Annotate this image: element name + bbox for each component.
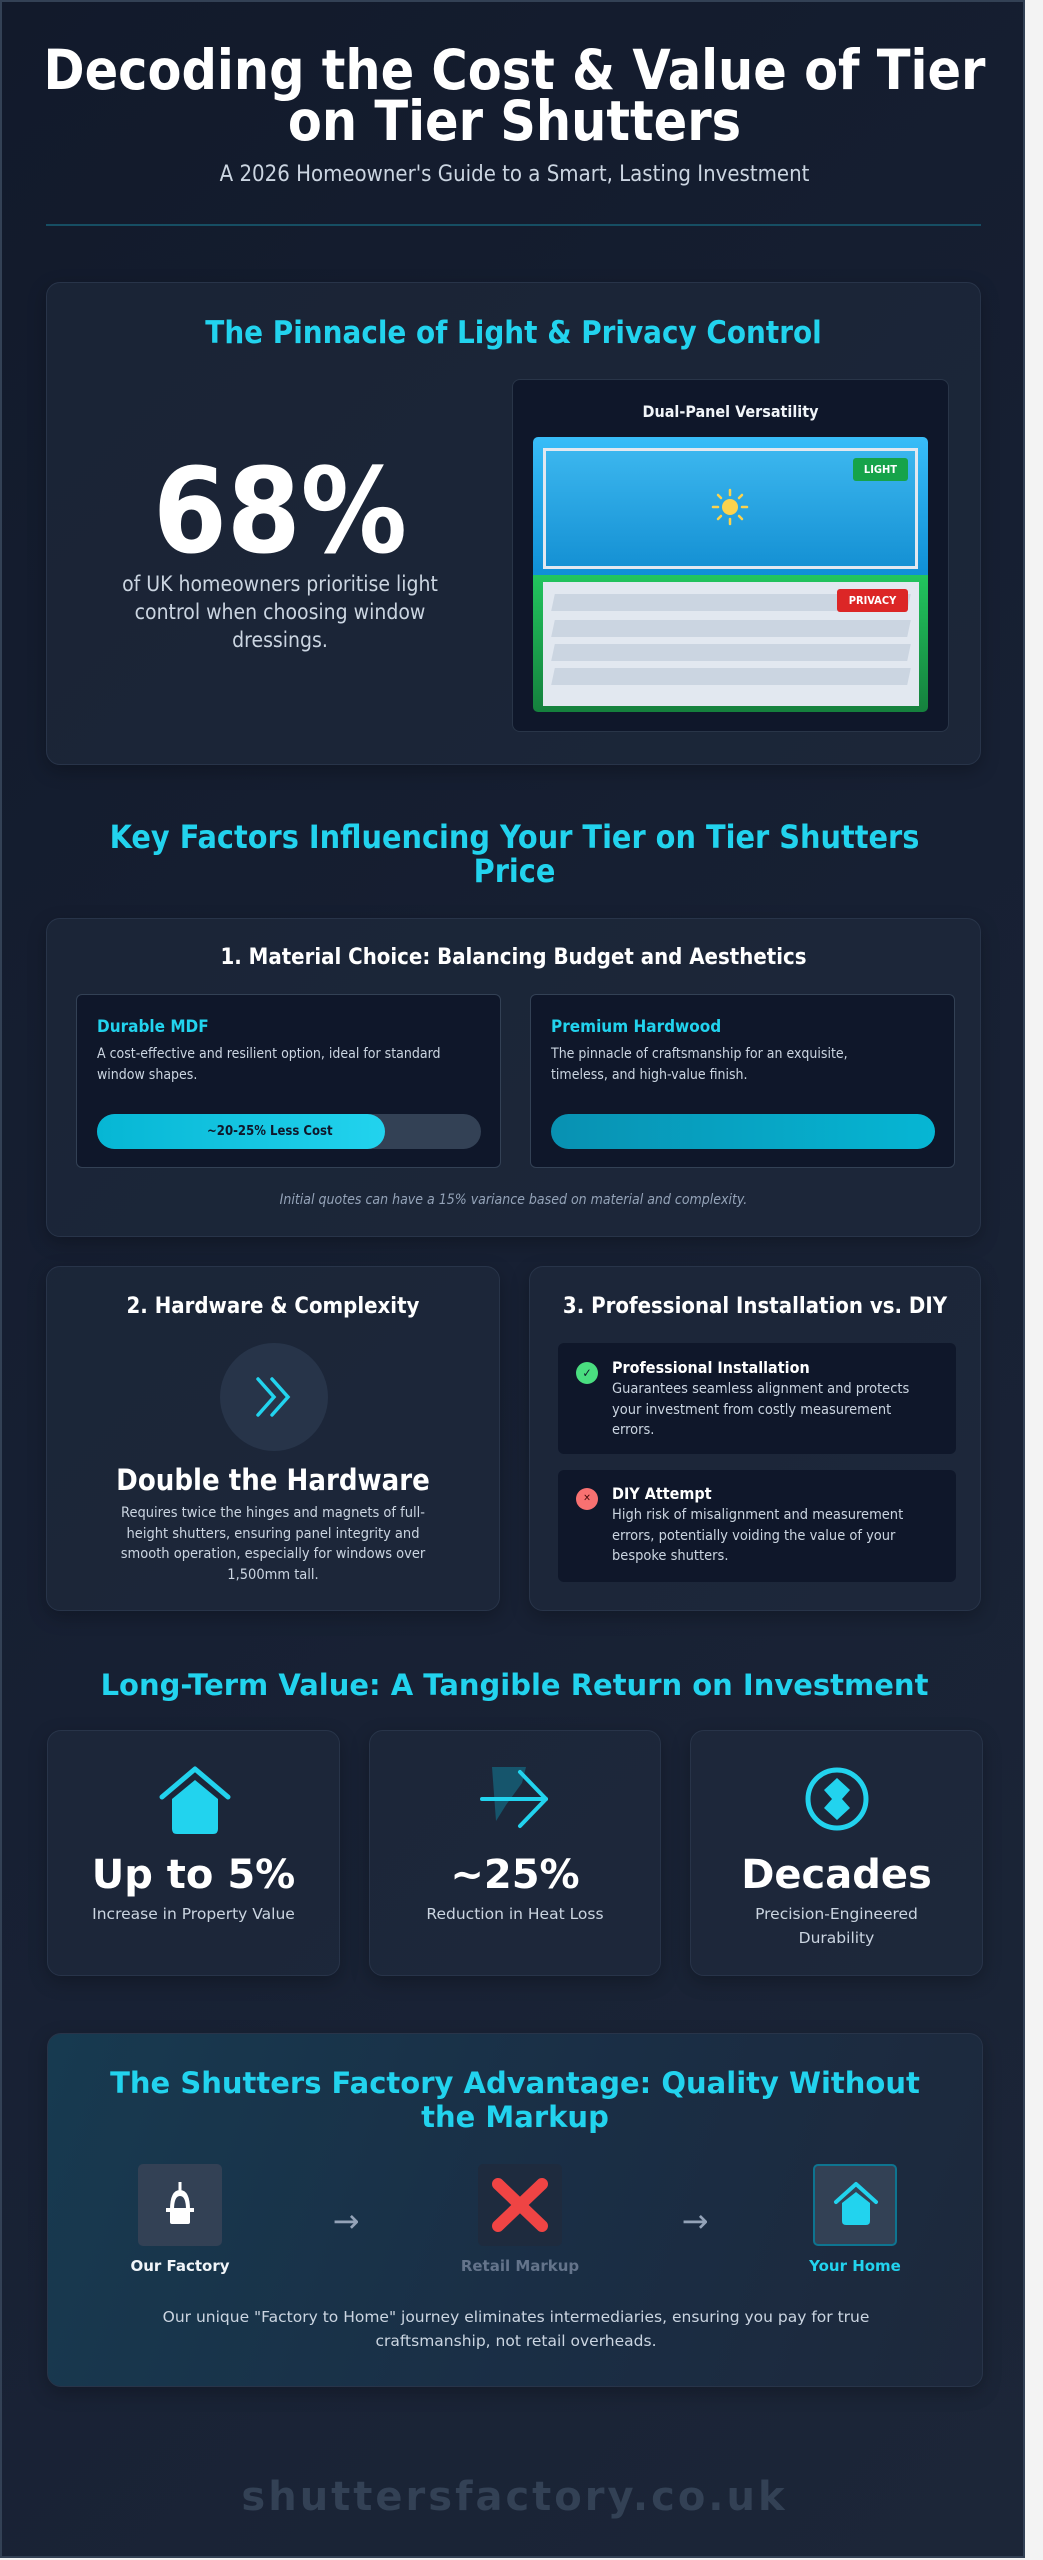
step: our factory: Our Factory [130, 2257, 230, 2275]
icon: house [160, 1766, 230, 1834]
item: professional: ✓ [582, 1366, 592, 1380]
icon: home [834, 2182, 878, 2225]
badge: light: LIGHT [864, 463, 897, 476]
step: retail markup [461, 2164, 579, 2275]
subtitle: A 2026 Homeowner's Guide to a Smart, Lasting Investment [220, 162, 809, 187]
item: DIY [558, 1470, 956, 1582]
item: professional: Professional Installation [612, 1358, 810, 1377]
stat: double the hardware: Double the Hardware [116, 1463, 430, 1497]
icon: factory [166, 2182, 194, 2224]
bar: MDF cost [97, 1114, 481, 1149]
title: Decoding the Cost & Value of Tier [44, 38, 985, 102]
stat caption: of UK homeowners prioritise light control when choosing window dressings. [122, 572, 438, 652]
item: DIY: ✕ [583, 1493, 591, 1504]
card: durable MDF [76, 994, 501, 1168]
card: durable MDF: Durable MDF [97, 1017, 209, 1037]
badge: privacy: PRIVACY [849, 594, 896, 607]
heading: key factors [110, 818, 919, 890]
panel: factory advantage [47, 2033, 983, 2387]
badge: privacy [837, 589, 908, 612]
panel: installation [529, 1266, 981, 1611]
heading: key factors: Price [474, 852, 555, 890]
icon: durability [806, 1768, 868, 1830]
window bottom: privacy [533, 575, 928, 712]
title [44, 38, 986, 153]
heading: advantage: The Shutters Factory Advantage: Quality Without [110, 2066, 920, 2100]
item: DIY: High risk of misalignment and measurement errors, potentially voiding the value of your bespoke shutters. [612, 1507, 903, 1564]
step: your home [809, 2164, 901, 2275]
card: premium hardwood [530, 994, 955, 1168]
icon: sun [712, 488, 748, 526]
step: our factory [130, 2164, 230, 2275]
arrow 2: → [682, 2202, 708, 2240]
card: heat loss [369, 1730, 661, 1976]
item: professional: Guarantees seamless alignment and protects your investment from costly measurement errors. [612, 1381, 909, 1438]
panel: light & privacy [46, 282, 981, 765]
card: property value: Increase in Property Value [92, 1905, 295, 1923]
heading: hardware: 2. Hardware & Complexity [127, 1294, 419, 1319]
card: premium hardwood: The pinnacle of craftsmanship for an exquisite, timeless, and high-value finish. [551, 1046, 848, 1083]
card: durability: Precision-Engineered Durability [755, 1905, 918, 1947]
arrow 1: → [333, 2202, 359, 2240]
illustration title: Dual-Panel Versatility [643, 402, 818, 421]
illustration: dual-panel window [512, 379, 949, 732]
card: durability [690, 1730, 983, 1976]
stat: decades: Decades [741, 1852, 932, 1898]
card: heat loss: Reduction in Heat Loss [426, 1905, 604, 1923]
panel: hardware [46, 1266, 500, 1611]
bar: MDF cost: ~20-25% Less Cost [207, 1124, 333, 1139]
stat: 68%: 68% [153, 442, 407, 580]
panel: material choice [46, 918, 981, 1237]
title: on Tier Shutters [288, 89, 741, 153]
heading: key factors: Key Factors Influencing Your Tier on Tier Shutters [110, 818, 919, 856]
footer: website: shuttersfactory.co.uk [241, 2474, 788, 2520]
icon: double chevron [220, 1343, 328, 1451]
badge: light [853, 458, 908, 481]
heading: advantage: the Markup [421, 2100, 609, 2134]
item: professional [558, 1343, 956, 1454]
step: retail markup: Retail Markup [461, 2257, 579, 2275]
step: your home: Your Home [809, 2257, 901, 2275]
heading: pinnacle: The Pinnacle of Light & Privacy Control [205, 315, 822, 351]
stat: 25%: ~25% [450, 1852, 580, 1898]
heading: advantage [110, 2066, 920, 2134]
icon: heat arrow [480, 1767, 548, 1828]
heading: installation: 3. Professional Installation vs. DIY [563, 1294, 947, 1319]
stat: up to 5%: Up to 5% [92, 1852, 295, 1898]
card: premium hardwood: Premium Hardwood [551, 1017, 721, 1037]
heading: material: 1. Material Choice: Balancing Budget and Aesthetics [220, 945, 807, 970]
item: DIY: DIY Attempt [612, 1484, 712, 1503]
icon: red cross [492, 2178, 548, 2232]
note: variance: Initial quotes can have a 15% variance based on material and complexity. [280, 1192, 747, 1208]
card: durable MDF: A cost-effective and resilient option, ideal for standard window shapes. [97, 1046, 441, 1083]
window top: light [533, 437, 928, 575]
bar: hardwood cost [551, 1114, 935, 1149]
card: property value [47, 1730, 340, 1976]
hardware description: Requires twice the hinges and magnets of full-height shutters, ensuring panel integrity and smooth operation, especially for windows over 1,500mm tall. [121, 1505, 425, 1583]
heading: long-term value: Long-Term Value: A Tangible Return on Investment [101, 1668, 928, 1702]
advantage description: Our unique "Factory to Home" journey eliminates intermediaries, ensuring you pay for true craftsmanship, not retail overheads. [163, 2308, 869, 2350]
